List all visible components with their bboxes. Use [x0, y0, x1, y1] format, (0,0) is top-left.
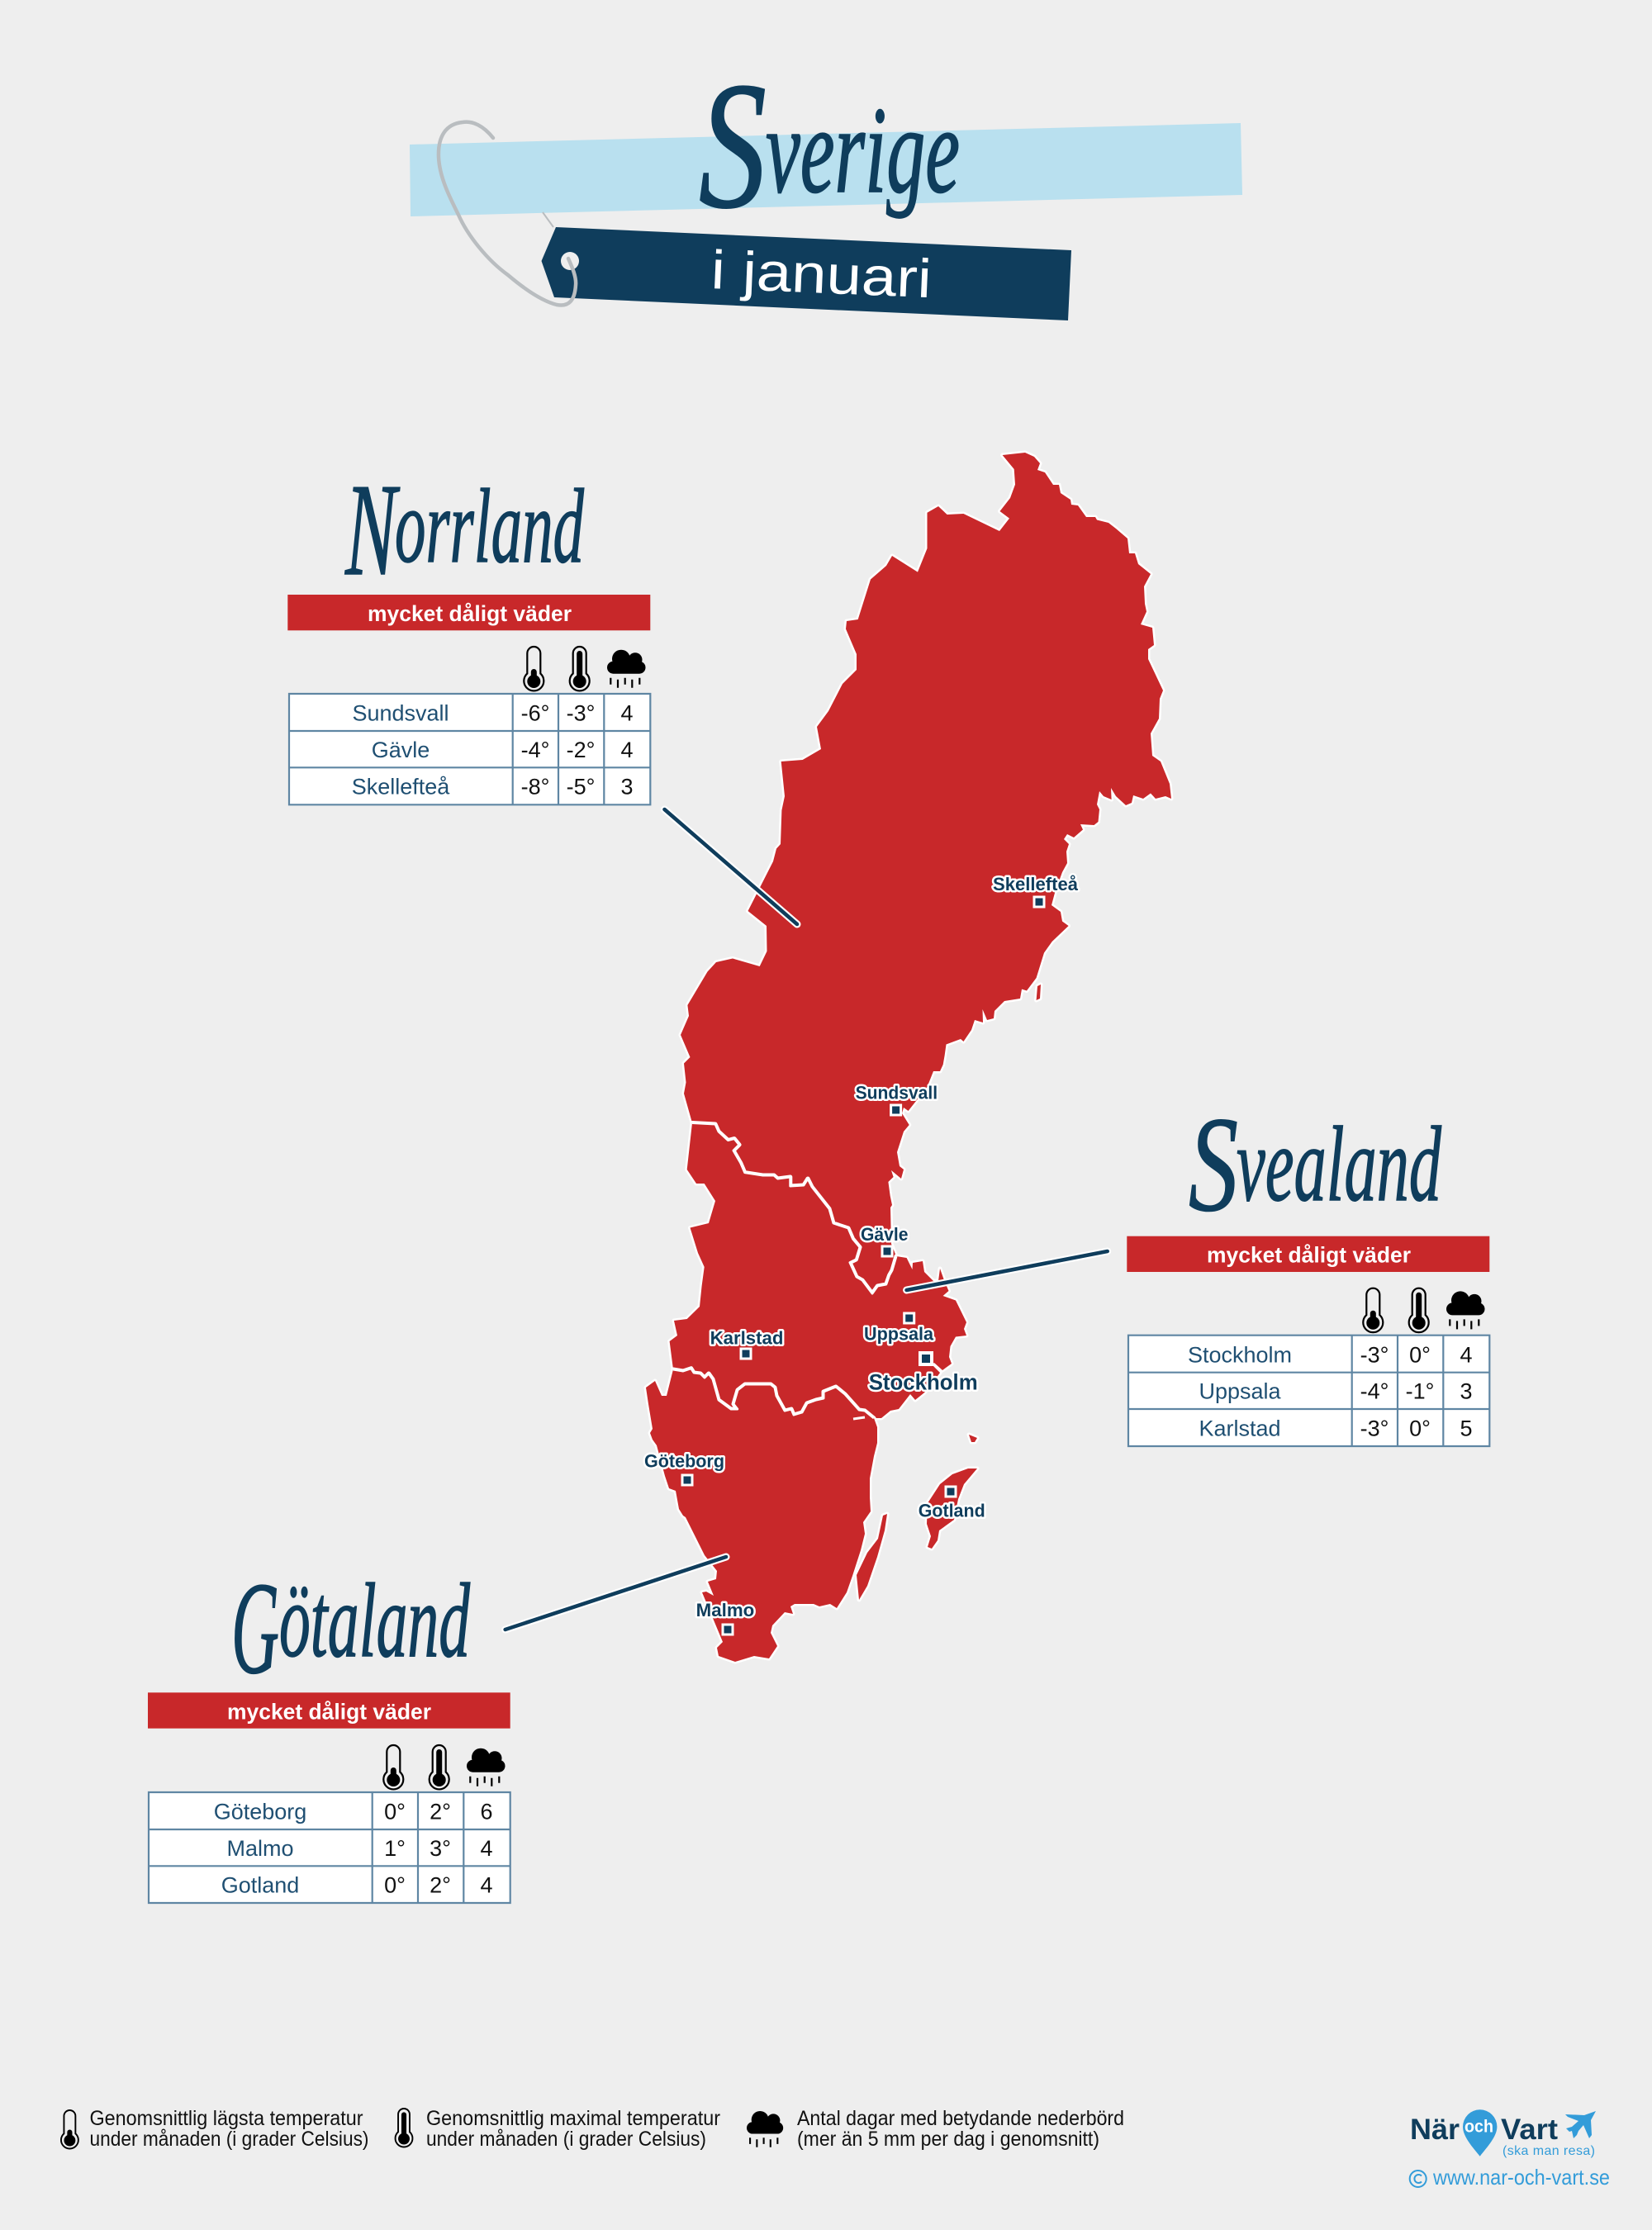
- table: 3°: [430, 1836, 451, 1861]
- table: 3: [1460, 1379, 1473, 1404]
- legend item: highest temperature: under månaden (i grader Celsius): [426, 2128, 706, 2151]
- city: Gävle: [861, 1224, 909, 1256]
- table: 1°: [384, 1836, 406, 1861]
- table: [149, 1792, 510, 1903]
- weather bar: mycket dåligt väder: [227, 1700, 431, 1725]
- small islands: [969, 985, 1041, 1442]
- city: Sundsvall: Sundsvall: [856, 1082, 938, 1103]
- logo: När och Vart: och: [1464, 2118, 1493, 2137]
- weather bar: mycket dåligt väder: [1207, 1243, 1411, 1268]
- legend item: precipitation days: Antal dagar med betydande nederbörd: [797, 2107, 1124, 2130]
- title: Sverige: S: [699, 45, 767, 246]
- table: 6: [480, 1800, 493, 1824]
- table: 4: [620, 701, 634, 726]
- table: -3°: [1360, 1416, 1389, 1440]
- website credit: www.nar-och-vart.se: [1432, 2165, 1610, 2190]
- table: 4: [1460, 1342, 1473, 1367]
- subtitle: i januari: i januari: [710, 239, 933, 309]
- city: Malmo: Malmo: [696, 1600, 754, 1620]
- city: Uppsala: [864, 1313, 934, 1344]
- connector: Götaland: [506, 1557, 726, 1630]
- thin string segment: [543, 212, 553, 227]
- city: Skellefteå: Skellefteå: [993, 874, 1079, 894]
- table: -1°: [1406, 1379, 1434, 1404]
- logo: När och Vart: (ska man resa): [1502, 2144, 1595, 2158]
- logo: När och Vart: När: [1410, 2114, 1460, 2146]
- heading: Götaland: ötaland: [279, 1562, 471, 1679]
- connector: Norrland: [664, 809, 797, 924]
- region: Götaland: [646, 1369, 877, 1662]
- icon: rain cloud: [1446, 1291, 1485, 1329]
- light blue band: [410, 123, 1242, 216]
- table: 0°: [1409, 1416, 1431, 1440]
- panel: Svealand: [1127, 1089, 1489, 1446]
- legend item: highest temperature: Genomsnittlig maximal temperatur: [426, 2107, 720, 2130]
- icon: min temperature: [524, 647, 544, 690]
- table: 0°: [384, 1800, 406, 1824]
- city: Gotland: [919, 1487, 985, 1521]
- table: [1128, 1336, 1489, 1446]
- legend item: lowest temperature: [61, 2107, 369, 2151]
- region: Svealand: [670, 1123, 966, 1418]
- city: Gävle: Gävle: [861, 1224, 909, 1245]
- heading: Svealand: S: [1189, 1089, 1238, 1240]
- table: -6°: [521, 701, 549, 726]
- table: 2°: [430, 1800, 451, 1824]
- legend item: lowest temperature: under månaden (i grader Celsius): [89, 2128, 368, 2151]
- table: Uppsala: [1199, 1379, 1282, 1404]
- tag string: [439, 122, 576, 306]
- logo: När och Vart: Vart: [1501, 2114, 1558, 2146]
- city: Stockholm: [869, 1353, 978, 1394]
- table: Karlstad: [1199, 1416, 1281, 1440]
- legend item: highest temperature: [396, 2107, 720, 2151]
- table: 4: [620, 738, 634, 762]
- panel: Norrland: [287, 456, 650, 804]
- icon: max temperature: [570, 647, 590, 690]
- weather bar: [1127, 1236, 1489, 1272]
- title banner: [410, 45, 1242, 320]
- table: 0°: [1409, 1342, 1431, 1367]
- city: Sundsvall: [856, 1082, 938, 1115]
- dark luggage tag: [542, 227, 1071, 320]
- legend item: precipitation days: (mer än 5 mm per dag i genomsnitt): [797, 2128, 1099, 2151]
- region: Norrland: [681, 453, 1171, 1293]
- weather bar: [287, 595, 650, 630]
- table: -4°: [521, 738, 549, 762]
- table: -2°: [567, 738, 595, 762]
- table: 0°: [384, 1873, 406, 1898]
- city: Karlstad: [710, 1327, 783, 1359]
- city: Göteborg: [644, 1451, 724, 1485]
- table: -3°: [567, 701, 595, 726]
- icon: min temperature: [383, 1745, 403, 1789]
- title: Sverige: verige: [766, 82, 960, 219]
- legend item: precipitation days: [747, 2107, 1124, 2151]
- table: Sundsvall: [352, 701, 449, 726]
- icon: map pin: [1463, 2109, 1497, 2156]
- tag hole: [561, 252, 579, 270]
- connector: Svealand: [907, 1251, 1108, 1290]
- panel: Götaland: [148, 1554, 510, 1903]
- heading: Norrland: N: [344, 456, 401, 603]
- icon: min temperature: [1363, 1288, 1383, 1332]
- table: Göteborg: [214, 1800, 306, 1824]
- table: -4°: [1360, 1379, 1389, 1404]
- heading: Norrland: orrland: [395, 467, 585, 585]
- Öland island: [857, 1514, 887, 1600]
- table: 5: [1460, 1416, 1473, 1440]
- table: -5°: [567, 775, 595, 799]
- inner regional borders: [673, 1123, 896, 1419]
- logo: När och Vart: [1410, 2109, 1596, 2158]
- heading: Svealand: vealand: [1237, 1105, 1442, 1224]
- table: -8°: [521, 775, 549, 799]
- table: -3°: [1360, 1342, 1389, 1367]
- table: 2°: [430, 1873, 451, 1898]
- table: Stockholm: [1188, 1342, 1292, 1367]
- icon: airplane: [1565, 2111, 1596, 2138]
- city: Malmo: [696, 1600, 754, 1635]
- map of Sweden: [506, 453, 1171, 1662]
- table: Gävle: [372, 738, 430, 762]
- table: 4: [480, 1873, 493, 1898]
- legend item: lowest temperature: Genomsnittlig lägsta temperatur: [89, 2107, 363, 2130]
- city: Skellefteå: [993, 874, 1079, 907]
- table: [289, 694, 650, 804]
- heading: Götaland: G: [231, 1554, 279, 1701]
- table: 4: [480, 1836, 493, 1861]
- city: Uppsala: Uppsala: [864, 1323, 934, 1344]
- city: Stockholm: Stockholm: [869, 1369, 978, 1394]
- city: Karlstad: Karlstad: [710, 1327, 783, 1348]
- icon: rain cloud: [607, 650, 646, 688]
- legend: [61, 2107, 1124, 2151]
- Gotland island: [927, 1468, 977, 1549]
- icon: rain cloud: [467, 1748, 506, 1786]
- table: Skellefteå: [352, 775, 450, 799]
- table: Malmo: [226, 1836, 294, 1861]
- city: Gotland: Gotland: [919, 1501, 985, 1521]
- icon: max temperature: [1409, 1288, 1429, 1332]
- city: Göteborg: Göteborg: [644, 1451, 724, 1472]
- icon: max temperature: [430, 1745, 449, 1789]
- table: Gotland: [221, 1873, 299, 1898]
- table: 3: [620, 775, 634, 799]
- weather bar: mycket dåligt väder: [368, 601, 572, 626]
- weather bar: [148, 1692, 510, 1729]
